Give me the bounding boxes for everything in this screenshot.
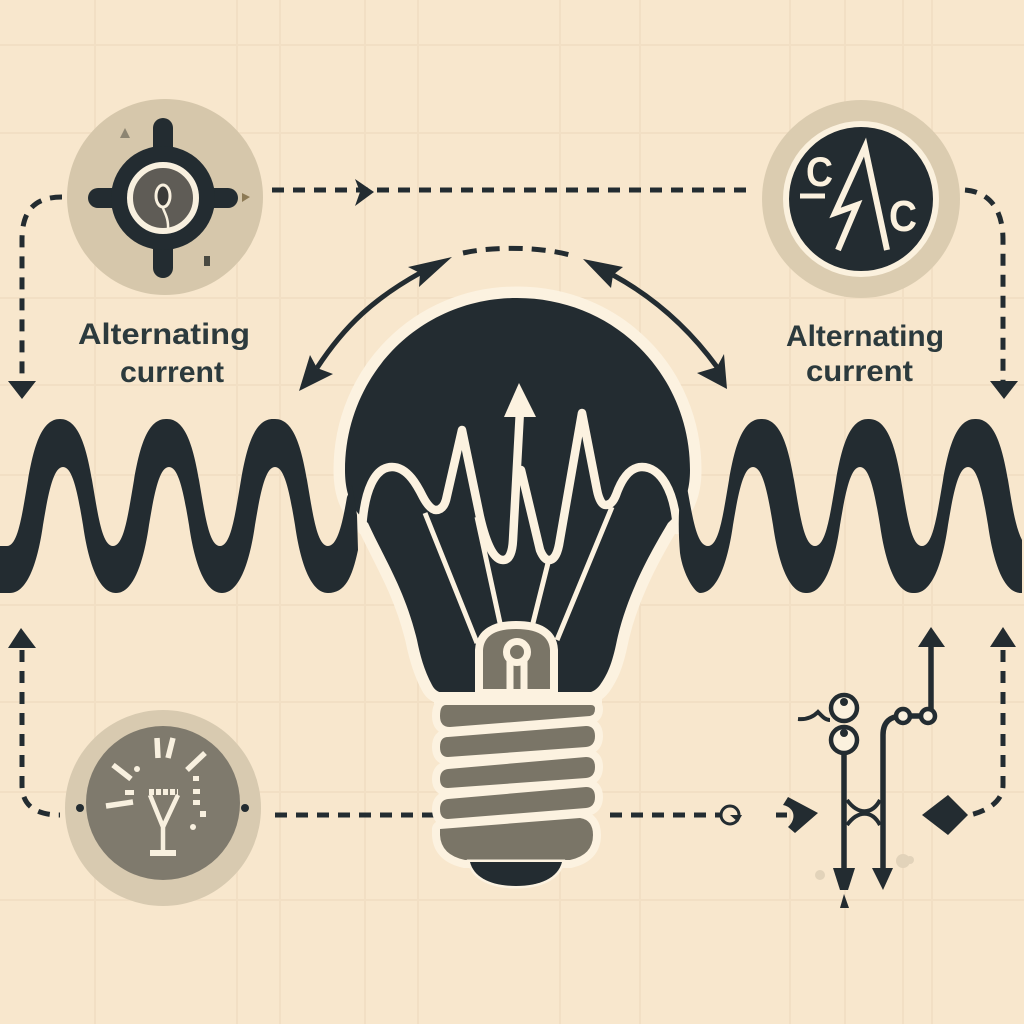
sine wave left [0, 419, 358, 593]
circuit symbol bottom right [798, 627, 945, 908]
icon: small dial on bottom dashed line [721, 806, 742, 824]
base contact [470, 862, 562, 886]
filament supports [425, 507, 612, 643]
icon: top-right AC symbol badge [762, 100, 960, 298]
icon: top-right AC symbol badge: C [889, 192, 917, 241]
label: right alternating: Alternating [786, 320, 944, 353]
dashed flow arrows [22, 190, 1003, 815]
icon: bottom-left glowing filament badge [65, 710, 261, 906]
arrowheads on flow lines [8, 179, 1018, 835]
bulb collar [479, 625, 554, 693]
double-headed arcs above bulb [299, 248, 727, 391]
collar loop [506, 642, 528, 693]
screw base bands [440, 705, 595, 860]
label: right current: current [806, 355, 913, 388]
icon: top-right AC symbol badge: C [806, 148, 833, 195]
icon: top-left switch badge [67, 99, 263, 295]
light bulb [345, 298, 690, 886]
label: left alternating: Alternating [78, 318, 250, 351]
sine wave right [679, 419, 1022, 593]
bulb glass silhouette [345, 298, 690, 693]
filament arrow head [504, 383, 536, 417]
screw base plate [434, 692, 602, 704]
label: left current: current [120, 356, 224, 389]
glowing waveform filament with arrow [362, 410, 677, 560]
